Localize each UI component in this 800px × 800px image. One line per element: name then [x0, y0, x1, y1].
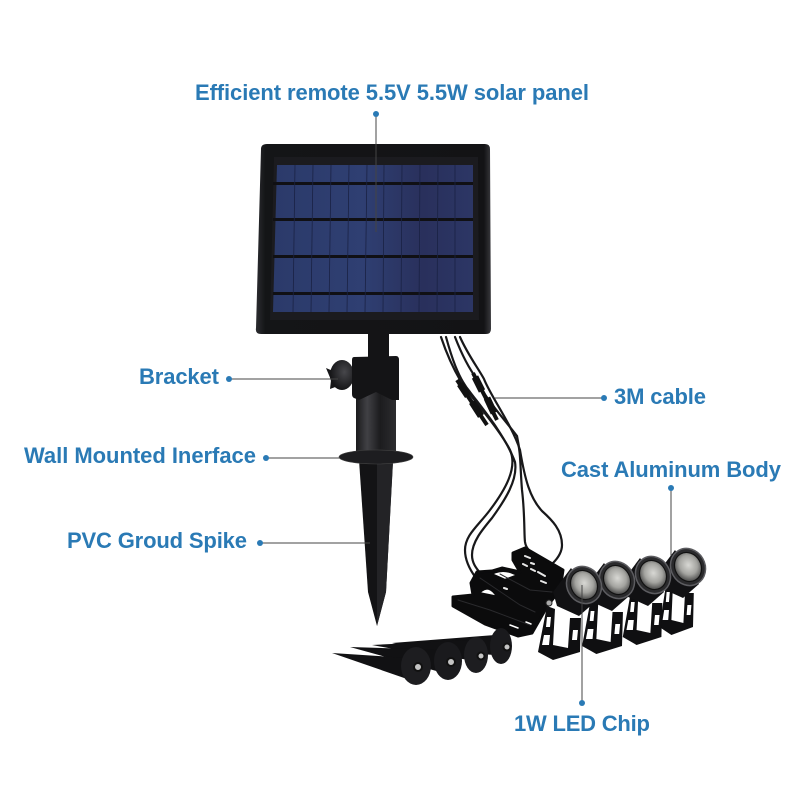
label: bracket — [139, 364, 338, 389]
cable connectors — [457, 373, 497, 425]
label: bracket: Bracket — [139, 364, 220, 389]
spike — [359, 460, 393, 626]
cable coil — [453, 548, 563, 636]
spotlights — [538, 542, 712, 660]
spotlight 1 — [538, 560, 608, 660]
solar cells — [273, 165, 473, 312]
panel frame — [256, 144, 491, 334]
solar panel — [256, 144, 491, 334]
flange — [339, 450, 413, 464]
spotlight 3 — [622, 550, 677, 645]
label: spike: PVC Groud Spike — [67, 528, 247, 553]
stake 3 — [372, 637, 488, 673]
stake 4 — [392, 628, 512, 664]
label: cable: 3M cable — [614, 384, 706, 409]
panel inner rim — [270, 157, 479, 320]
label: aluminum body: Cast Aluminum Body — [561, 457, 782, 482]
cables — [441, 337, 563, 636]
stake 2 — [350, 642, 462, 680]
label: solar panel: Efficient remote 5.5V 5.5W solar panel — [195, 80, 589, 105]
spotlight 2 — [582, 555, 641, 654]
bracket head — [352, 356, 399, 400]
ground spike with bracket — [326, 334, 413, 626]
label: spike — [67, 528, 370, 553]
label: aluminum body — [561, 457, 782, 556]
bracket knob — [326, 360, 354, 390]
label: solar panel — [195, 80, 589, 232]
mounting tube — [356, 392, 396, 457]
spotlight 4 — [657, 542, 712, 635]
label: LED chip — [514, 585, 650, 736]
lamp stakes — [332, 628, 512, 685]
stake 1 — [332, 647, 431, 685]
bracket arm — [368, 334, 389, 358]
label: LED chip: 1W LED Chip — [514, 711, 650, 736]
label: wall mounted interface: Wall Mounted Inerface — [24, 443, 256, 468]
label: cable — [495, 384, 706, 409]
